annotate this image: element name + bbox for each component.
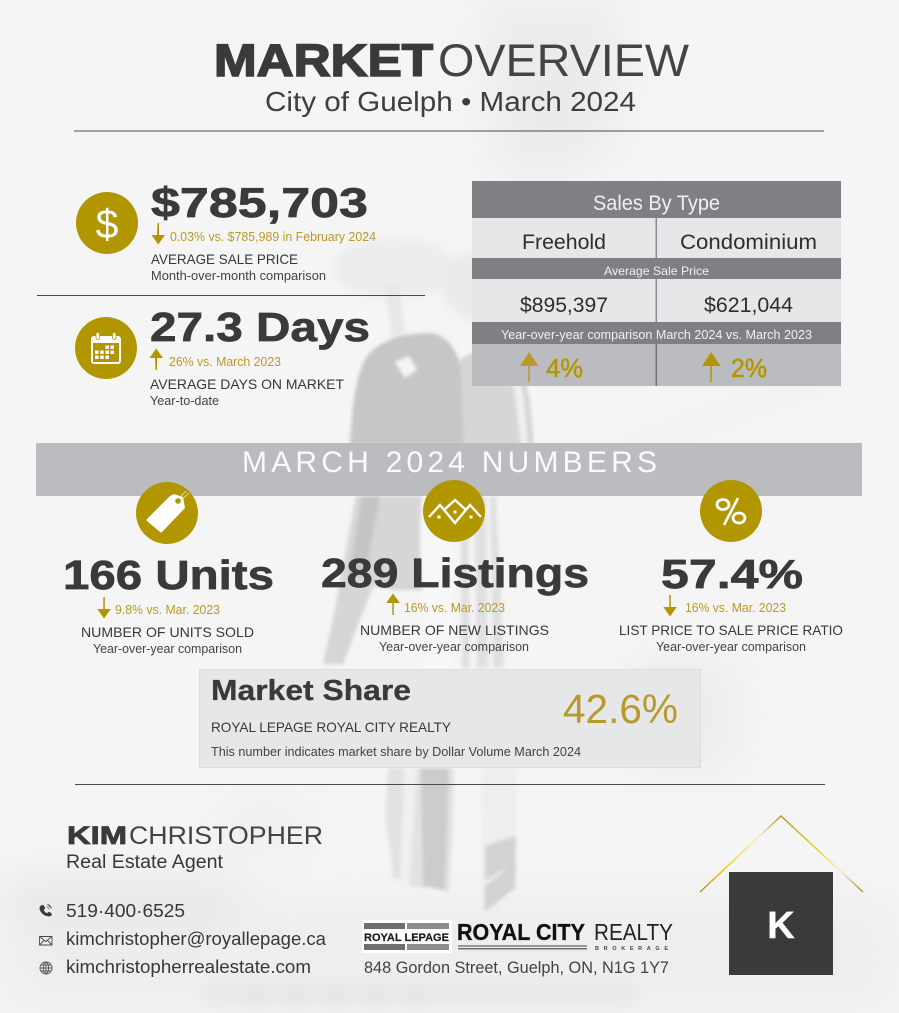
change text: 9.8% vs. Mar. 2023 bbox=[115, 602, 220, 617]
condominium change: 2% bbox=[731, 353, 767, 383]
row label: year-over-year: Year-over-year comparison March 2024 vs. March 2023 bbox=[501, 328, 812, 342]
value: 289 Listings bbox=[321, 550, 589, 596]
value: 57.4% bbox=[661, 551, 803, 597]
label: NUMBER OF UNITS SOLD bbox=[81, 624, 254, 640]
contact: phone: 519·400·6525 bbox=[66, 901, 185, 921]
logo: K house mark bbox=[700, 816, 863, 975]
banner: March 2024 numbers bbox=[36, 443, 862, 496]
note: This number indicates market share by Dollar Volume March 2024 bbox=[211, 745, 581, 759]
note: Year-over-year comparison bbox=[656, 640, 806, 654]
heading: Market Share bbox=[211, 675, 411, 707]
logo: Royal LePage bbox=[362, 920, 452, 953]
agent name: CHRISTOPHER bbox=[129, 822, 323, 850]
label: AVERAGE DAYS ON MARKET bbox=[150, 376, 344, 392]
logo: Royal City Realty bbox=[457, 919, 673, 952]
title: MARKET bbox=[214, 35, 433, 86]
icon: globe bbox=[40, 962, 52, 974]
freehold change: 4% bbox=[546, 353, 583, 383]
logo: Royal City Realty: ROYAL CITY bbox=[457, 919, 585, 945]
value: 27.3 Days bbox=[150, 304, 370, 350]
icon: price tag bbox=[136, 482, 198, 544]
note: Year-over-year comparison bbox=[93, 642, 242, 656]
icon: phone bbox=[40, 904, 52, 916]
address: 848 Gordon Street, Guelph, ON, N1G 1Y7 bbox=[364, 959, 669, 977]
arrow down bbox=[152, 223, 165, 244]
contact: website: kimchristopherrealestate.com bbox=[66, 957, 311, 977]
logo: K house mark: K bbox=[767, 905, 795, 947]
agent title: Real Estate Agent bbox=[66, 852, 224, 873]
note: Month-over-month comparison bbox=[151, 269, 326, 283]
stat: average sale price bbox=[76, 179, 376, 283]
stat: list price to sale price ratio bbox=[619, 480, 843, 654]
roof bbox=[700, 816, 863, 892]
logo: Royal LePage: ROYAL LEPAGE bbox=[364, 932, 449, 944]
change text: 16% vs. Mar. 2023 bbox=[404, 600, 505, 615]
icon: houses bbox=[423, 480, 485, 542]
column: freehold: Freehold bbox=[522, 231, 606, 254]
icon: envelope bbox=[40, 936, 52, 945]
arrow down bbox=[663, 595, 677, 616]
contact: email: kimchristopher@royallepage.ca bbox=[66, 929, 327, 949]
panel: sales by type table bbox=[472, 181, 841, 386]
title bbox=[214, 35, 690, 86]
stat: new listings bbox=[321, 480, 589, 654]
icon: dollar: $ bbox=[96, 201, 119, 247]
row label: average sale price: Average Sale Price bbox=[604, 264, 709, 278]
label: NUMBER OF NEW LISTINGS bbox=[360, 622, 549, 638]
stat: units sold bbox=[63, 482, 274, 656]
table heading: Sales By Type bbox=[593, 192, 720, 215]
logo: Royal City Realty: REALTY bbox=[594, 919, 673, 945]
condominium change bbox=[702, 352, 767, 383]
note: Year-over-year comparison bbox=[379, 640, 529, 654]
value: $785,703 bbox=[151, 179, 368, 226]
freehold change bbox=[520, 352, 583, 383]
stat: average days on market bbox=[75, 304, 370, 408]
brokerage name: ROYAL LEPAGE ROYAL CITY REALTY bbox=[211, 719, 452, 735]
arrow up bbox=[386, 594, 400, 615]
logo: Royal City Realty: BROKERAGE bbox=[595, 946, 668, 952]
label: LIST PRICE TO SALE PRICE RATIO bbox=[619, 622, 843, 638]
change text: 16% vs. Mar. 2023 bbox=[685, 600, 786, 615]
icon: calendar bbox=[75, 317, 137, 379]
freehold price: $895,397 bbox=[520, 294, 608, 317]
icon: dollar bbox=[76, 192, 138, 254]
note: Year-to-date bbox=[150, 394, 219, 408]
change text: 0.03% vs. $785,989 in February 2024 bbox=[170, 229, 376, 244]
agent name: KIM bbox=[67, 822, 127, 850]
value: 42.6% bbox=[563, 686, 678, 732]
change text: 26% vs. March 2023 bbox=[169, 354, 281, 369]
icon: percent bbox=[700, 480, 762, 542]
value: 166 Units bbox=[63, 552, 274, 598]
condominium price: $621,044 bbox=[704, 294, 793, 317]
label: AVERAGE SALE PRICE bbox=[151, 251, 298, 267]
subtitle: City of Guelph • March 2024 bbox=[265, 86, 636, 117]
title: OVERVIEW bbox=[438, 35, 690, 86]
arrow down bbox=[97, 597, 111, 618]
arrow up bbox=[150, 348, 163, 370]
banner: March 2024 numbers: MARCH 2024 NUMBERS bbox=[242, 446, 657, 479]
panel: market share bbox=[200, 670, 700, 768]
column: condominium: Condominium bbox=[680, 231, 817, 254]
